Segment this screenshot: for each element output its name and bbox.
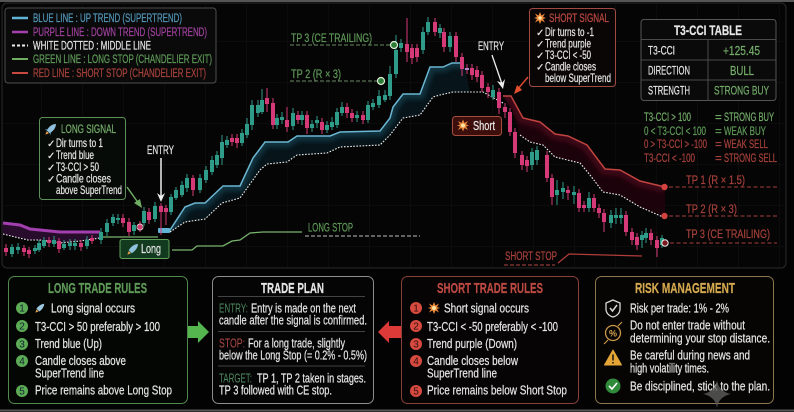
label: TP3 short <box>662 229 777 246</box>
purple supertrend band <box>3 223 100 243</box>
table: T3-CCI: T3-CCI TABLE <box>674 22 742 38</box>
rule 3 <box>410 336 517 351</box>
candles <box>6 17 662 258</box>
rule 2: T3-CCI < -50 preferably < -100 <box>427 319 558 334</box>
rule 1: 1 <box>413 304 419 314</box>
legend: strength scale <box>644 112 777 165</box>
risk text 2 <box>630 318 770 346</box>
label: TP3 short: TP 3 (CE TRAILING) <box>686 229 770 241</box>
arrow: long signal to candle <box>127 187 142 208</box>
arrow: short entry <box>492 55 505 89</box>
icon: rocket <box>43 121 59 137</box>
signal ring: long <box>137 224 143 230</box>
label: TP2 long <box>290 69 384 84</box>
entry text: ENTRY: <box>219 300 248 316</box>
table: T3-CCI: STRONG BUY <box>714 84 769 98</box>
rule 3: 3 <box>413 340 419 350</box>
label: TP2 short: TP 2 (R × 3) <box>686 204 737 216</box>
rule 5: 5 <box>413 386 419 398</box>
callout: long signal: ✓ <box>47 151 55 162</box>
entry text <box>219 300 367 328</box>
stop text: below the Long Stop (= 0.2% - 0.5%) <box>219 348 367 362</box>
icon: percent target <box>604 322 622 344</box>
callout: short signal: below SuperTrend <box>545 71 611 85</box>
callout: short signal: Trend purple <box>545 36 591 50</box>
panel: long trade rules: LONG TRADE RULES <box>48 280 147 297</box>
target text: TP 3 followed with CE stop. <box>219 382 332 398</box>
icon: check <box>606 378 620 394</box>
rule 5: 5 <box>19 386 25 398</box>
label: TP1 short <box>661 175 777 190</box>
callout: long signal: Dir turns to 1 <box>56 136 103 150</box>
legend: strength scale: = <box>715 139 722 151</box>
label: TP3 long: TP 3 (CE TRAILING) <box>291 33 372 45</box>
callout: long signal: Trend blue <box>56 148 94 162</box>
legend: strength scale: 0 < T3-CCI < 100 <box>644 126 706 138</box>
icon: warning <box>604 350 622 365</box>
callout: short signal: SHORT SIGNAL <box>549 11 609 25</box>
arrow: short signal to candle <box>514 77 528 94</box>
red supertrend band <box>503 96 665 217</box>
label: TP2 short <box>661 204 777 219</box>
rule 4: SuperTrend line <box>427 366 497 380</box>
panel: short trade rules <box>402 276 578 404</box>
icon: percent target: % <box>609 328 617 338</box>
entry text: Entry is made on the next <box>251 300 356 316</box>
callout: short signal: ✓ <box>536 28 544 39</box>
risk text 1: Risk per trade: 1% - 2% <box>630 300 729 316</box>
legend: strength scale: T3-CCI > 100 <box>644 112 691 124</box>
arrow: short to plan <box>378 321 401 343</box>
panel: trade plan <box>212 276 374 404</box>
target text: TP 1, TP 2 taken in stages. <box>257 370 366 386</box>
legend <box>5 8 216 83</box>
blue supertrend band <box>158 63 470 233</box>
legend: WHITE DOTTED : MIDDLE LINE <box>33 40 151 52</box>
icon: shield <box>606 300 620 317</box>
callout: long signal <box>40 118 126 200</box>
label: short stop: SHORT STOP <box>505 251 557 263</box>
label: long stop: LONG STOP <box>308 222 353 234</box>
callout: long signal: LONG SIGNAL <box>61 122 116 136</box>
label: TP1 short: TP 1 (R × 1.5) <box>686 175 745 187</box>
callout: long signal: T3-CCI > 50 <box>56 160 99 174</box>
rule 1 <box>16 300 135 316</box>
stop text: STOP: <box>219 336 245 350</box>
rule 4: 4 <box>413 356 419 368</box>
badge: long: Long <box>141 241 161 256</box>
legend: strength scale: T3-CCI < -100 <box>644 153 695 165</box>
rule 3 <box>16 336 102 351</box>
table: T3-CCI: DIRECTION <box>648 64 690 78</box>
icon: explosion small <box>457 120 469 132</box>
legend: strength scale: = <box>715 112 722 124</box>
risk text 3: high volatility times. <box>630 360 709 376</box>
callout: short signal <box>530 8 616 86</box>
table: T3-CCI: T3-CCI <box>648 44 675 58</box>
rule 4 <box>16 353 126 380</box>
callout: short signal: Candle closes <box>545 60 596 74</box>
table: T3-CCI: +125.45 <box>723 43 760 58</box>
rule 1: Long signal occurs <box>51 300 135 316</box>
panel: chart <box>2 3 786 268</box>
panel: short trade rules: SHORT TRADE RULES <box>437 280 543 297</box>
rule 5: Price remains below Short Stop <box>427 382 567 398</box>
stop text <box>219 336 367 362</box>
callout: short signal: T3-CCI < -50 <box>545 48 591 62</box>
callout: long signal: ✓ <box>47 139 55 150</box>
rule 2 <box>16 319 160 334</box>
panel: risk management <box>596 276 774 404</box>
callout: long signal: above SuperTrend <box>56 183 122 197</box>
callout: short signal: Dir turns to -1 <box>545 25 594 39</box>
rule 4 <box>410 353 518 380</box>
panel: trade plan: TRADE PLAN <box>261 280 324 297</box>
risk text 3 <box>630 348 750 376</box>
legend: strength scale: 0 > T3-CCI > -100 <box>644 139 707 151</box>
green line: long stop <box>100 232 420 250</box>
rule 4: Candle closes below <box>427 353 518 368</box>
rule 1: 1 <box>19 304 25 314</box>
rule 4: SuperTrend line <box>35 366 104 380</box>
risk text 2: Do not enter trade without <box>630 318 745 332</box>
short stop line <box>504 254 642 265</box>
rule 1 <box>410 300 529 316</box>
panel: long trade rules <box>8 276 188 404</box>
legend: strength scale: WEAK BUY <box>724 126 766 138</box>
arrow: long to plan <box>188 321 209 343</box>
label: short entry: ENTRY <box>478 39 504 53</box>
risk text 3: Be careful during news and <box>630 348 750 362</box>
rule 1: Short signal occurs <box>444 300 529 316</box>
arrow: long entry <box>157 158 165 202</box>
rule 2: T3-CCI > 50 preferably > 100 <box>35 319 160 334</box>
legend: strength scale: = <box>715 153 722 165</box>
rule 2: 2 <box>19 322 25 332</box>
table: T3-CCI: STRENGTH <box>648 84 690 98</box>
rule 2 <box>410 319 558 334</box>
legend: strength scale: = <box>715 126 722 138</box>
legend: GREEN LINE : LONG STOP (CHANDELIER EXIT) <box>33 54 212 66</box>
legend: strength scale: WEAK SELL <box>724 139 768 151</box>
badge: short: Short <box>473 118 495 133</box>
callout: short signal: ✓ <box>536 62 544 74</box>
callout: long signal: ✓ <box>47 163 55 174</box>
target text: TARGET: <box>219 370 252 386</box>
badge: short <box>452 116 502 136</box>
rule 4: 4 <box>19 356 25 368</box>
callout: long signal: Candle closes <box>56 172 111 186</box>
rule 3: 3 <box>19 340 25 350</box>
rule 3: Trend blue (Up) <box>35 336 102 351</box>
legend: PURPLE LINE : DOWN TREND (SUPERTREND) <box>33 27 207 39</box>
callout: long signal: ✓ <box>47 174 55 186</box>
watermark sparkle <box>703 380 731 408</box>
panel: risk management: RISK MANAGEMENT <box>635 280 735 297</box>
icon: explosion <box>534 12 546 24</box>
rule 2: 2 <box>413 322 419 332</box>
rule 4: Candle closes above <box>35 353 126 368</box>
callout: short signal: ✓ <box>536 51 544 62</box>
target text <box>219 370 366 398</box>
white dotted middle line <box>3 92 663 243</box>
table: T3-CCI: BULL <box>730 63 754 78</box>
stop text: For a long trade, slightly <box>248 336 345 350</box>
label: long entry: ENTRY <box>147 143 174 157</box>
table: T3-CCI <box>641 20 776 100</box>
rule 5: Price remains above Long Stop <box>35 382 172 398</box>
legend: RED LINE : SHORT STOP (CHANDELIER EXIT) <box>33 68 206 80</box>
callout: short signal: ✓ <box>536 40 544 50</box>
entry text: candle after the signal is confirmed. <box>219 312 367 328</box>
rule 3: Trend purple (Down) <box>427 336 517 351</box>
icon: rocket small <box>126 242 140 256</box>
rule 5 <box>16 382 172 398</box>
badge: long <box>120 240 169 258</box>
label: TP2 long: TP 2 (R × 3) <box>291 69 341 81</box>
legend: BLUE LINE : UP TREND (SUPERTREND) <box>33 13 182 25</box>
